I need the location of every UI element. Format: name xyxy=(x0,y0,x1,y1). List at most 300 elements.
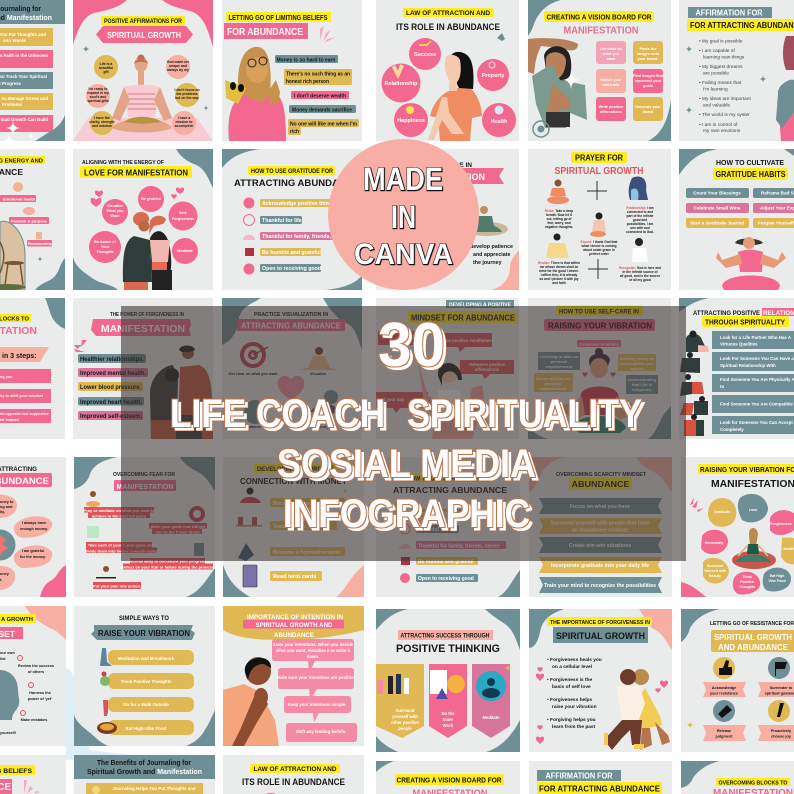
vision steps: Decorate your xyxy=(635,105,661,109)
mindset tips: yourself! xyxy=(0,731,16,735)
bookmark panels: Surround xyxy=(396,708,415,713)
vision steps: board xyxy=(643,110,654,114)
hugging figures xyxy=(604,669,670,750)
mat xyxy=(73,118,213,141)
corner blobs xyxy=(74,457,215,597)
labels xyxy=(0,182,53,246)
vision steps: want xyxy=(606,57,616,61)
bookmark panels: Work xyxy=(443,723,454,728)
corner blobs xyxy=(222,149,362,290)
affirmation petals xyxy=(0,494,52,590)
prayer paragraphs: and faith xyxy=(552,281,566,285)
panel: love for manifestation xyxy=(73,149,213,290)
gratitude rows xyxy=(260,199,356,272)
heading: OVERCOMING FEAR FOR xyxy=(113,472,175,478)
panel: law of attraction repeat xyxy=(223,755,364,794)
heading band: IMPORTANCE OF INTENTION IN xyxy=(247,614,343,621)
affirmation circles: mission to xyxy=(176,120,192,124)
benefit labels: Improved mental health. xyxy=(80,370,146,377)
corner blob xyxy=(528,406,671,439)
panel: raise your vibration xyxy=(74,606,215,746)
pills: Think Positive Thoughts xyxy=(121,679,172,684)
affirmation circles xyxy=(86,55,200,135)
speech bubbles xyxy=(272,639,357,742)
speech bubbles: Make sure your intentions are positive. xyxy=(276,675,356,680)
vibration blobs: Eat High xyxy=(770,574,784,578)
prayer paragraphs: possibilities. I am xyxy=(627,222,653,226)
mindset tips: power of 'yet' xyxy=(28,697,52,701)
belief labels: Money is so hard to earn xyxy=(276,57,336,63)
benefit labels: Improved heart health. xyxy=(80,399,142,406)
mindset tips: Review the success xyxy=(18,664,54,668)
money practice labels xyxy=(270,498,345,581)
vision steps: affirmations xyxy=(600,110,622,114)
bullet list: • I am in control of xyxy=(699,122,738,128)
prayer paragraphs: about under grace in xyxy=(583,248,615,252)
resistance icons xyxy=(713,657,790,722)
heading: DEVELOPING A SPIRITUAL xyxy=(257,467,335,473)
prayer paragraphs: me whose dream shall be xyxy=(540,265,579,269)
corner blob xyxy=(35,258,65,290)
corner blobs xyxy=(223,565,250,597)
panel: forgiveness in manifestation xyxy=(73,298,213,439)
abundance circles: Relationship xyxy=(384,81,418,87)
heading: GRATITUDE HABITS xyxy=(716,170,786,179)
prayer paragraphs: Realize: There is that within xyxy=(538,261,580,265)
heading xyxy=(408,300,518,323)
heading band xyxy=(0,0,65,24)
corner blob xyxy=(25,606,66,640)
corner blob xyxy=(45,298,65,329)
man praying xyxy=(223,657,279,746)
background pale blue shape xyxy=(66,668,140,760)
sparkle xyxy=(342,488,348,494)
self-care labels: personalities you xyxy=(621,361,654,366)
self-care labels: Reading books by xyxy=(620,356,655,361)
captions: Get clear on what you want xyxy=(228,372,278,376)
heading: AFFIRMATION FOR xyxy=(546,772,613,780)
steps: ng you xyxy=(0,375,13,379)
affirmation circles: the problems xyxy=(176,92,198,96)
self-care labels: empowerment xyxy=(539,386,567,391)
couple icons xyxy=(680,330,709,436)
vision steps: images onto xyxy=(637,52,660,56)
love circles: Visualize xyxy=(107,204,123,208)
heading xyxy=(556,472,646,490)
gratitude rows xyxy=(416,509,506,582)
panel: limiting beliefs repeat (cropped) xyxy=(0,755,66,794)
belief labels: honest rich person xyxy=(286,79,329,85)
heading band xyxy=(223,606,364,640)
scarcity ribbons: Surround yourself with people that have xyxy=(550,520,650,526)
self-care labels: personal xyxy=(545,381,561,386)
love circles: Thoughts xyxy=(96,250,114,254)
labels: Passion & purpose xyxy=(11,218,48,223)
abundance circles xyxy=(382,38,516,137)
vibration blobs: Gratitude xyxy=(714,510,730,514)
heading band: Spiritual Growth and Manifestation xyxy=(87,769,202,776)
caption: and appreciate xyxy=(473,252,510,258)
heading: POSITIVE THINKING xyxy=(396,643,500,655)
love circles: Self- xyxy=(179,211,188,215)
heading: CREATING A VISION BOARD FOR xyxy=(546,12,652,22)
scarcity ribbons: an abundance mindset xyxy=(572,528,628,534)
central circle xyxy=(0,530,16,560)
heading: RAISING YOUR VIBRATION xyxy=(548,322,652,330)
arch room illustration xyxy=(0,221,26,290)
woman xyxy=(418,362,484,439)
affirmation circles: but on the way xyxy=(175,96,199,100)
vibration blobs: Think xyxy=(742,575,752,579)
affirmation circles: clarity, strength xyxy=(89,120,115,124)
pills: Meditation and Breathwork xyxy=(118,656,175,661)
heading: LETTING GO OF LIMITING BELIEFS xyxy=(228,15,328,22)
forgiveness bullets: on a cellular level xyxy=(552,664,592,670)
heading xyxy=(713,778,793,794)
heading: ITS ROLE IN ABUNDANCE xyxy=(242,777,345,787)
pink accent dashes xyxy=(690,497,704,512)
prayer paragraphs: good and xyxy=(633,218,647,222)
gratitude rows: Open to receiving good xyxy=(262,266,321,272)
money practice labels: Read tarot cards xyxy=(273,574,316,580)
vision steps: Find images that xyxy=(633,74,664,78)
heading xyxy=(698,464,794,490)
forgiveness bullets xyxy=(547,657,602,730)
heading: CULTIVATING PATIENCE IN xyxy=(388,162,472,169)
heading xyxy=(544,305,655,331)
panel: attracting abundance (cropped) xyxy=(0,457,66,597)
first benefit xyxy=(86,783,203,794)
heading: MANIFESTATION xyxy=(564,26,638,36)
prayer paragraphs: Relationship: I am xyxy=(626,206,654,210)
speech bubbles: and your day xyxy=(378,397,405,402)
steps banner: in 3 steps: xyxy=(2,353,37,360)
love circles: Be Aware of xyxy=(94,240,117,244)
speech bubbles: Shift any limiting beliefs. xyxy=(296,729,346,734)
affirmation circles: beautiful xyxy=(99,66,113,70)
abundance circles: Property xyxy=(482,73,505,79)
prayer paragraphs: Recognize: God is here and xyxy=(619,266,661,270)
corner blob xyxy=(681,609,720,642)
heading: FOR ATTRACTING ABUNDANCE xyxy=(539,784,660,794)
heading: ITS ROLE IN ABUNDANCE xyxy=(396,22,500,32)
bookmark panels xyxy=(376,664,510,738)
mindset tips: our own xyxy=(0,651,15,655)
bookmark panels: other positive xyxy=(391,720,419,725)
prayer paragraphs: out, letting go of xyxy=(547,217,572,221)
woman praying xyxy=(428,52,482,141)
love circles: What you xyxy=(106,209,124,213)
prayer paragraphs: negative thoughts. xyxy=(545,225,573,229)
panel: letting go of resistance xyxy=(681,609,794,752)
heading xyxy=(0,466,52,487)
caption: the journey xyxy=(473,260,502,266)
heading: RAISE YOUR VIBRATION xyxy=(98,629,190,638)
sparkles xyxy=(685,45,767,114)
gratitude rows: Thankful for life xyxy=(418,527,456,533)
action labels: divide them into twelve 1-month tasks xyxy=(85,548,158,554)
love circles xyxy=(89,186,198,264)
habit bubbles: Start a Gratitude Journal xyxy=(690,220,744,226)
forgiveness bullets: raise your vibration xyxy=(552,704,597,710)
heading xyxy=(0,314,37,337)
gratitude icons xyxy=(243,198,255,274)
speech bubbles: Keep your intentions simple. xyxy=(288,702,346,707)
heading: SPIRITUAL GROWTH xyxy=(554,166,644,177)
vision steps: Get clear on xyxy=(600,47,623,51)
affirmation circles: spiritual gifts xyxy=(87,99,109,103)
relationship rows: Completely xyxy=(720,427,744,432)
prayer paragraphs: one with and xyxy=(630,226,650,230)
speech bubbles xyxy=(376,331,514,413)
affirmation circles: I have the xyxy=(94,116,110,120)
bullet list: • Failing means that xyxy=(699,80,742,86)
panel: attracting relationships xyxy=(679,298,794,439)
self-care labels: Understanding xyxy=(628,377,657,382)
heading: ATTRACTING ABUNDANCE xyxy=(393,485,507,495)
corner blob xyxy=(40,565,66,597)
affirmation petals: ng and xyxy=(0,505,13,509)
resistance ribbons: judgment xyxy=(714,734,733,738)
vision steps: your board. xyxy=(638,57,658,61)
self-care labels: Bloom articles on xyxy=(536,376,570,381)
bullet list: • My goal is possible xyxy=(699,38,743,44)
action labels: Take each of your 1 year goals and xyxy=(88,542,155,548)
benefit labels: Improved self-esteem. xyxy=(80,413,142,420)
heading: ATTRACTING ABUNDANCE xyxy=(241,322,342,330)
pill icons xyxy=(97,648,117,734)
heading: A GROWTH xyxy=(1,617,33,623)
resistance ribbons: Acknowledge xyxy=(712,686,736,690)
main title: SPIRITUALITY xyxy=(407,392,642,436)
heading: MANIFESTATION xyxy=(711,479,794,490)
scarcity ribbons xyxy=(539,498,662,593)
panel: affirmation for abundance xyxy=(679,0,794,141)
corner blob xyxy=(490,250,519,290)
affirmation petals: enough money. xyxy=(20,527,48,531)
captions: Affirmations xyxy=(239,425,261,429)
prayer paragraphs: I affirm this; it is already xyxy=(541,273,578,277)
heading xyxy=(544,11,654,36)
habit bubbles: Count Your Blessings xyxy=(693,190,741,196)
prayer paragraphs: connected to and xyxy=(627,210,653,214)
forgiveness bullets: • Forgiving helps you xyxy=(547,717,596,723)
mindset tips: of others xyxy=(28,670,44,674)
resistance ribbons xyxy=(703,682,794,741)
corner blobs xyxy=(73,0,213,47)
prayer paragraphs xyxy=(538,206,661,285)
corner blobs xyxy=(529,609,564,648)
corner blobs xyxy=(222,298,362,350)
abundance circles: Happiness xyxy=(397,118,425,124)
corner blobs xyxy=(528,0,671,141)
corner blobs xyxy=(376,609,520,752)
panel: positive thinking xyxy=(376,609,520,752)
belief labels: There's no such thing as an xyxy=(286,72,350,78)
steps banner xyxy=(0,347,49,362)
caption: develop patience xyxy=(470,244,513,250)
prayer paragraphs: in the infinite source of xyxy=(622,270,658,274)
prayer paragraphs: Expect: I thank God that xyxy=(581,240,618,244)
scarcity ribbons: Create win-win situations xyxy=(569,543,631,549)
heading: MINDSET FOR ABUNDANCE xyxy=(411,314,516,322)
heading: HOW TO CULTIVATE xyxy=(716,158,784,167)
panel: positive affirmations xyxy=(73,0,213,141)
prayer paragraphs: connected to God. xyxy=(626,230,654,234)
heading xyxy=(537,770,662,794)
heading: SPIRITUAL GROWTH xyxy=(714,633,792,642)
mindset tips: list xyxy=(0,657,6,661)
yoga figure on mat xyxy=(732,528,776,569)
heading: SPIRITUAL GROWTH xyxy=(107,30,181,40)
heading xyxy=(0,614,36,639)
corner blobs xyxy=(73,149,213,290)
icons xyxy=(86,491,205,578)
heart icon xyxy=(278,376,304,400)
relationship rows: Look for a Life Partner Who Has A xyxy=(720,335,792,340)
vision steps: Gather your xyxy=(600,78,622,82)
panel: prayer for spiritual growth xyxy=(528,149,671,290)
forgiveness bullets: basis of self love xyxy=(552,684,591,690)
money practice labels: Teach online healing xyxy=(273,524,327,530)
heading: MANIFESTATION xyxy=(101,323,185,335)
panel: importance of intention xyxy=(223,606,364,746)
panel: importance of forgiveness xyxy=(529,609,672,752)
prayer paragraphs: fear, worry, and xyxy=(547,221,571,225)
habit bubbles xyxy=(686,188,794,228)
corner blob xyxy=(679,298,709,312)
gratitude rows: Be humble and grateful xyxy=(262,250,321,256)
vibration blobs: Positive xyxy=(740,580,754,584)
hearts xyxy=(582,372,616,377)
vision steps: what you xyxy=(602,52,620,56)
vision steps: materials xyxy=(603,83,619,87)
relationship rows: Spiritual Relationship With xyxy=(720,363,776,368)
heading xyxy=(242,764,345,794)
affirmation circles: always by my xyxy=(167,68,189,72)
panel: aligning energy (cropped) xyxy=(0,149,65,290)
bookmark panels: Meditate xyxy=(482,715,500,720)
love circles: Want xyxy=(110,214,120,218)
prayer paragraphs: so and I picture it with joy xyxy=(539,277,579,281)
self-care labels: Conscious breathing xyxy=(579,342,619,346)
heading: ATTRACTING ABUNDANCE xyxy=(234,178,359,188)
panel: growth mindset (cropped) xyxy=(0,606,66,746)
bullet list: my own emotions xyxy=(703,128,741,134)
vision steps: represent your xyxy=(635,79,662,83)
panel: gratitude for abundance xyxy=(222,149,362,290)
woman xyxy=(776,36,794,141)
action labels: Reflect on your fear or failure during the process. xyxy=(121,564,215,570)
woman xyxy=(528,38,587,137)
heading xyxy=(693,308,794,327)
heading: ABUNDANCE xyxy=(572,479,630,489)
prayer paragraphs: perfect order xyxy=(589,252,610,256)
bullet list: • The world is my oyster xyxy=(699,112,750,118)
heading: LOVE FOR MANIFESTATION xyxy=(84,168,188,178)
corner blob xyxy=(681,582,706,597)
heading: AND ABUNDANCE xyxy=(718,643,789,652)
head silhouette xyxy=(0,670,19,720)
action labels: Put your plan into action. xyxy=(93,584,141,588)
badge: made in canva: CANVA xyxy=(354,238,453,271)
prayer paragraphs: breath. Now let it xyxy=(546,213,573,217)
heading xyxy=(240,464,348,486)
practice icons xyxy=(236,488,262,587)
affirmation petals: ily. xyxy=(0,510,5,514)
self-care labels: that Life is xyxy=(632,382,653,387)
action labels xyxy=(84,507,215,589)
sparkle xyxy=(686,721,694,729)
heading: CREATING A VISION BOARD FOR xyxy=(396,776,502,784)
sparkles xyxy=(1,120,35,141)
action labels: you to the 5 year dream xyxy=(156,530,201,534)
mindset tips xyxy=(0,651,54,735)
love circles: Meditate xyxy=(177,249,193,253)
vibration blobs: Generosity xyxy=(705,541,723,545)
love circles: Forgiveness xyxy=(172,217,194,221)
love circles: Your xyxy=(101,245,110,249)
heading band: SPIRITUAL GROWTH AND xyxy=(256,622,333,629)
heading xyxy=(396,8,500,32)
bullet list: I'm learning xyxy=(703,86,728,92)
prayer paragraphs: Relax: Take a deep xyxy=(545,209,573,213)
money practice labels: Become a hypnotherapist xyxy=(273,550,340,556)
main title: SOSIAL MEDIA xyxy=(277,442,536,486)
steps: ief instead xyxy=(0,418,19,422)
gratitude rows: Thankful for life xyxy=(262,218,302,224)
affirmation circles: expand in my xyxy=(87,91,109,95)
affirmation petals: I always have xyxy=(22,521,46,525)
heading xyxy=(396,630,500,655)
love circles: Be grateful xyxy=(141,197,161,201)
heading xyxy=(710,621,794,652)
prayer paragraphs: mine for the good I desire. xyxy=(539,269,579,273)
self-care labels: personal xyxy=(551,359,567,364)
bullet list xyxy=(699,38,751,134)
relationship rows xyxy=(712,331,794,434)
panel: overcoming fear xyxy=(74,457,215,597)
meditating figure xyxy=(112,54,172,132)
resistance ribbons: choose joy xyxy=(771,734,792,738)
resistance ribbons: Surrender to xyxy=(770,686,793,690)
mindset tips: Make mistakes xyxy=(21,718,47,722)
heading: THROUGH SPIRITUALITY xyxy=(705,318,785,326)
panel: positive mindset xyxy=(376,298,519,439)
self-care labels: Listening to talks on xyxy=(540,354,579,359)
prayer paragraphs: part of the infinite xyxy=(627,214,654,218)
bookmark panels: Do the xyxy=(441,711,455,716)
heading: MANIFESTATION xyxy=(116,482,174,491)
panel: law of attraction xyxy=(376,0,519,141)
gratitude rows: Thankful for family, friends, career xyxy=(262,234,348,240)
yoga figure xyxy=(466,206,508,236)
corner blobs xyxy=(529,457,672,492)
speech bubbles: what you want, visualize it or write it xyxy=(275,648,351,653)
steps xyxy=(0,369,51,423)
heading: PRAYER FOR xyxy=(575,154,623,162)
vibration blobs: Beauty xyxy=(709,574,721,578)
affirmation petals: oney to xyxy=(0,500,14,504)
benefit labels: Lower blood pressure. xyxy=(80,384,141,391)
heading: SPIRITUAL GROWTH xyxy=(556,631,645,642)
self-care labels: empowerment xyxy=(545,364,573,369)
meditating woman xyxy=(558,348,640,433)
affirmation circles: unique and xyxy=(169,64,187,68)
relationship rows: to xyxy=(720,384,724,389)
resistance ribbons: Release xyxy=(717,729,731,733)
heading xyxy=(0,765,35,794)
